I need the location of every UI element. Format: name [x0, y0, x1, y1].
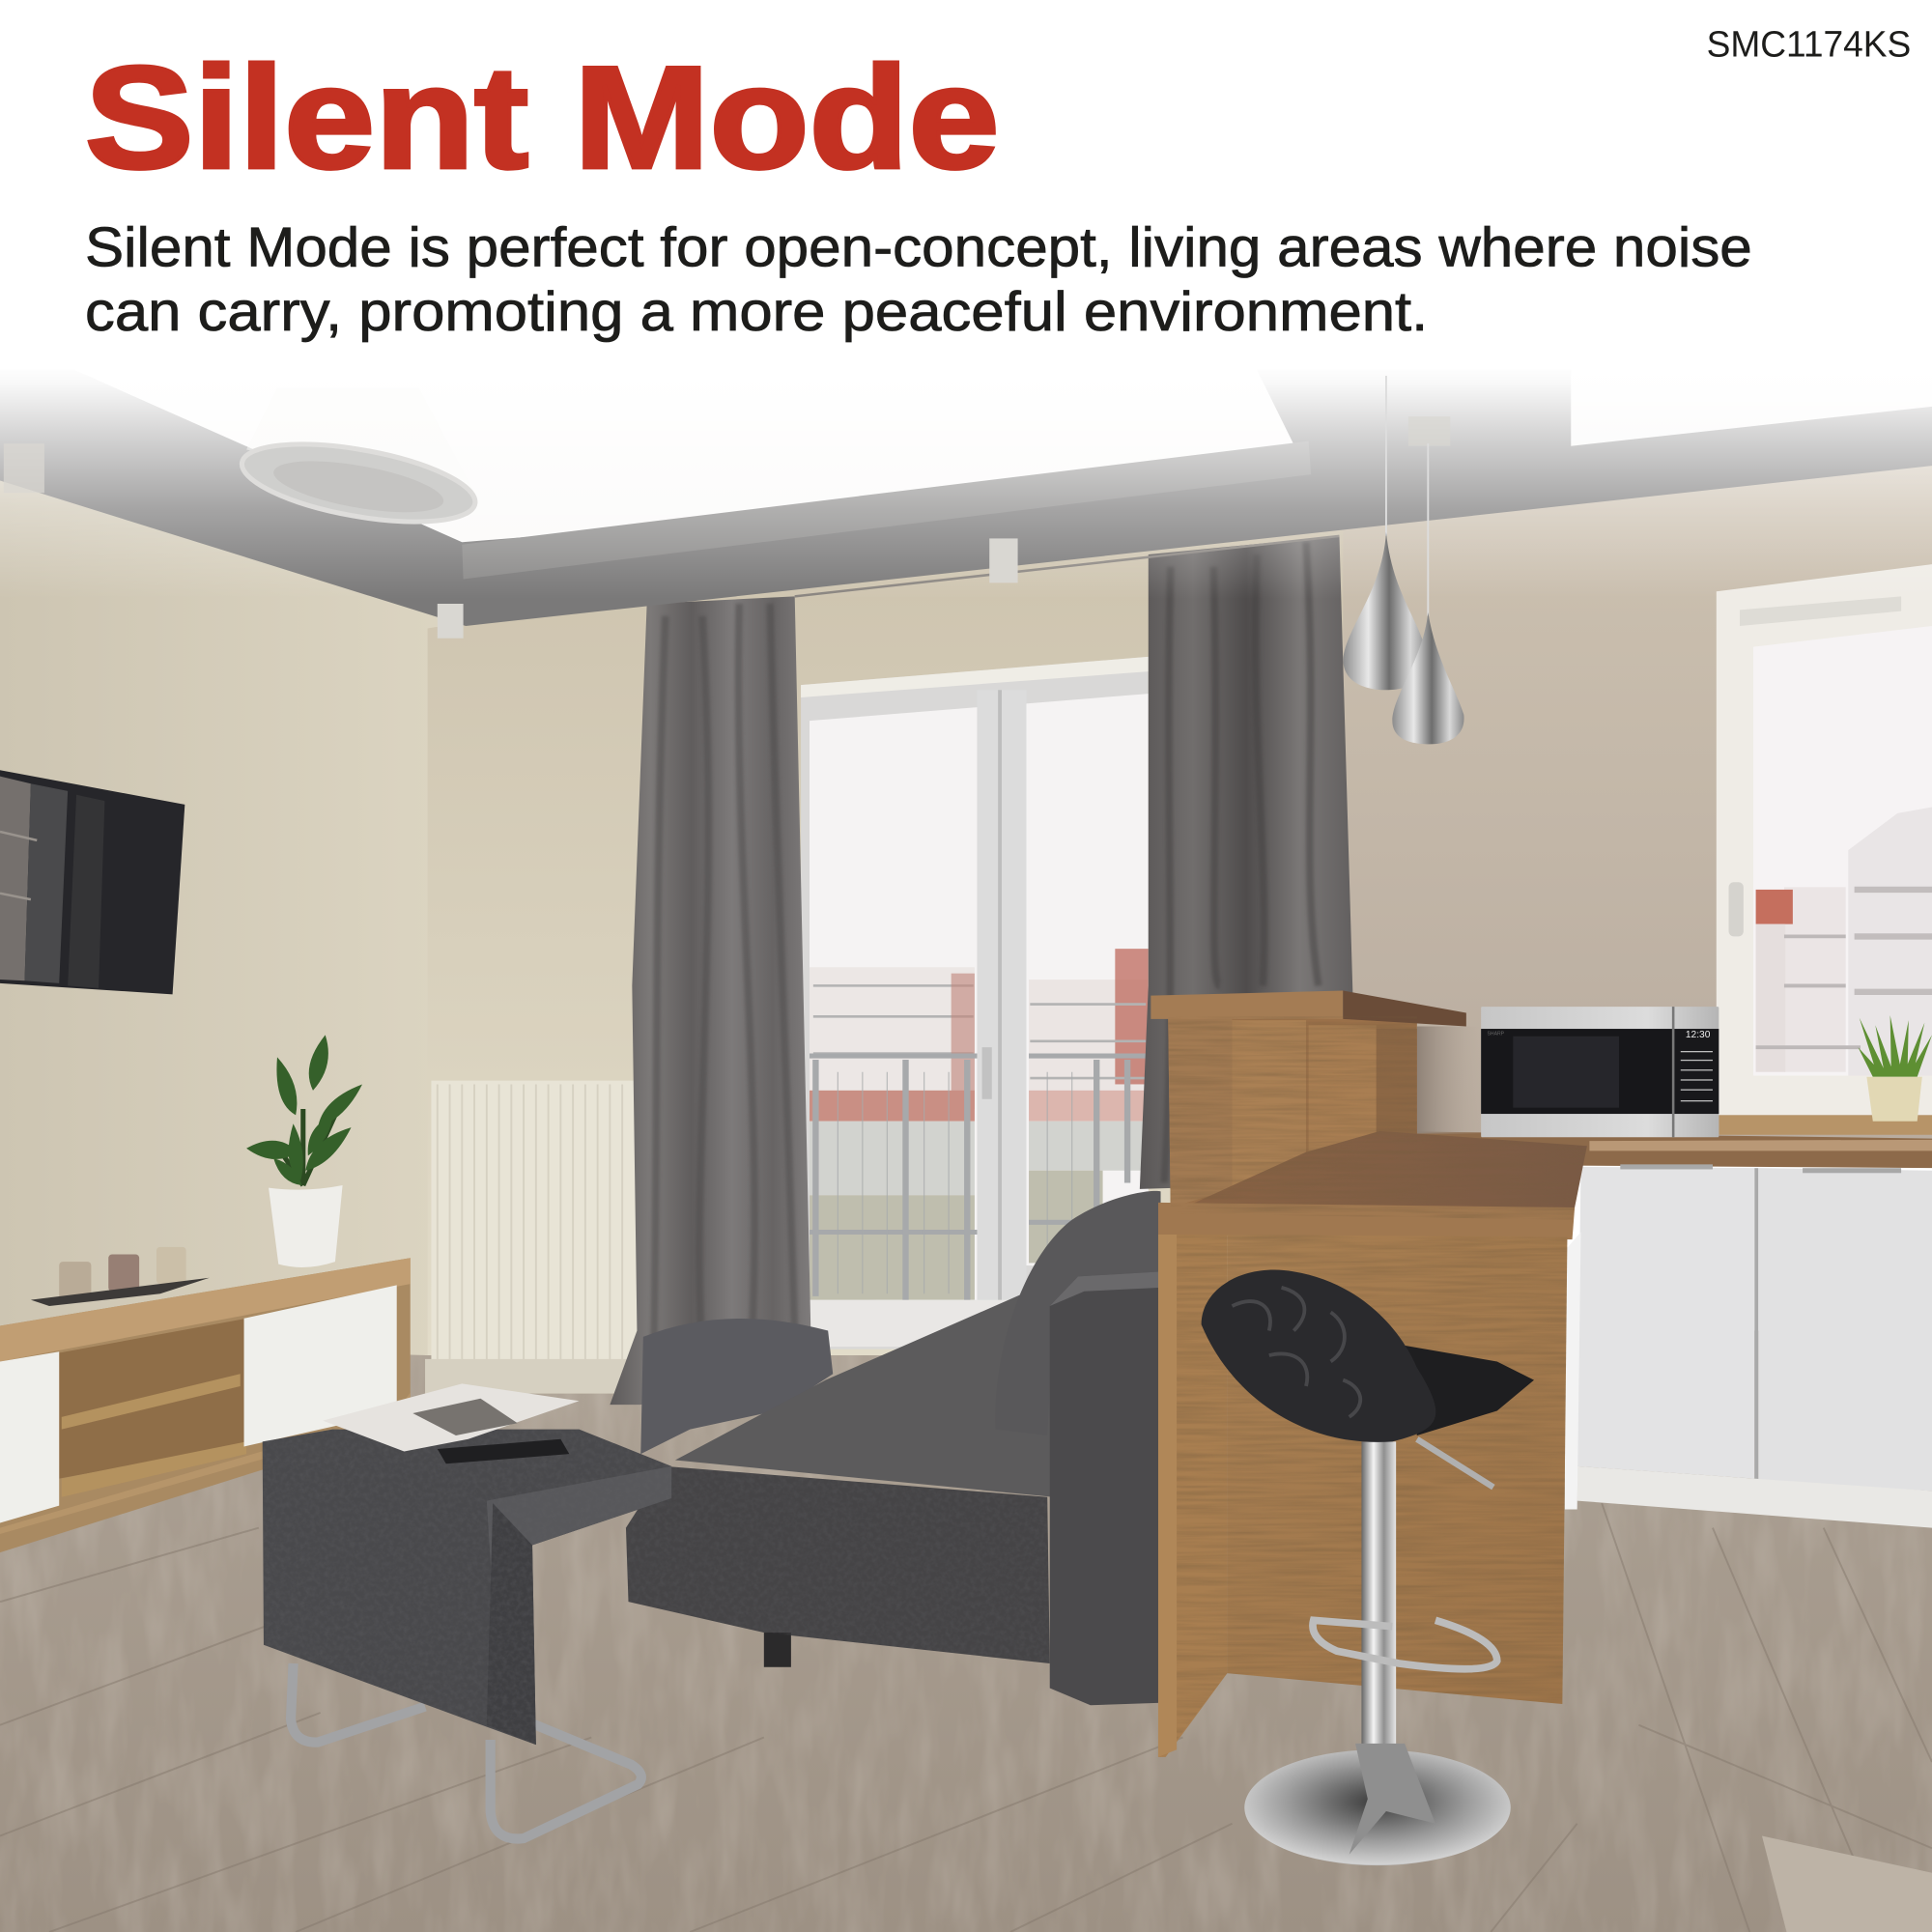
pouf [640, 1319, 833, 1454]
ceiling spotlights [4, 416, 1450, 639]
right curtain [795, 536, 1353, 1189]
model number: SMC1174KS [1707, 24, 1911, 66]
top white background [0, 0, 1932, 367]
left wall [0, 474, 466, 1355]
stool base [1244, 1749, 1511, 1865]
counter top right [1380, 1131, 1932, 1168]
shadowed wall behind shelf [1417, 1026, 1481, 1133]
microwave [1481, 1007, 1719, 1137]
pendant lamps [1343, 376, 1464, 744]
back wall [425, 524, 1350, 1355]
patio door [801, 657, 1149, 1350]
description line 1: Silent Mode is perfect for open-concept, living areas where noise [85, 217, 1752, 279]
room photograph [0, 462, 1932, 1932]
white fade over ceiling [0, 365, 1932, 599]
window plant [1858, 1015, 1932, 1122]
counter shelf top [1171, 1131, 1587, 1220]
white doors [244, 1285, 397, 1446]
candles [31, 1247, 210, 1306]
description line 2: can carry, promoting a more peaceful environment. [85, 281, 1428, 343]
white cabinets [1565, 1164, 1932, 1528]
floor [0, 1331, 1932, 1932]
magazine and remote [323, 1383, 579, 1463]
balcony railing [810, 1056, 1146, 1325]
right wall [1343, 462, 1932, 1146]
microwave: 12:30 [1686, 1030, 1711, 1040]
kitchen counter and cabinets [1151, 564, 1932, 1757]
left curtain [610, 596, 813, 1405]
title: Silent Mode [85, 36, 999, 198]
buildings outside [1756, 807, 1932, 1076]
bar stool [1202, 1270, 1534, 1865]
ceiling lamp [237, 388, 481, 536]
bench legs [291, 1663, 641, 1838]
sofa [626, 1191, 1161, 1705]
description [85, 217, 1752, 343]
stool seat [1405, 1346, 1534, 1435]
glass panes [810, 707, 977, 1306]
ottoman bench [263, 1430, 671, 1838]
sofa seat [675, 1282, 1054, 1497]
wood grain [1168, 1016, 1587, 1740]
buildings outside [810, 949, 1149, 1300]
radiator [425, 1081, 640, 1394]
tv [0, 770, 185, 994]
ceiling [0, 370, 1932, 626]
upper shelf unit [1151, 991, 1466, 1208]
microwave: SHARP [1488, 1031, 1505, 1037]
tv console [0, 1258, 411, 1552]
right window [1717, 564, 1932, 1135]
plant [246, 1035, 362, 1267]
stool footrest [1313, 1620, 1497, 1669]
counter front panel [1227, 1235, 1567, 1704]
